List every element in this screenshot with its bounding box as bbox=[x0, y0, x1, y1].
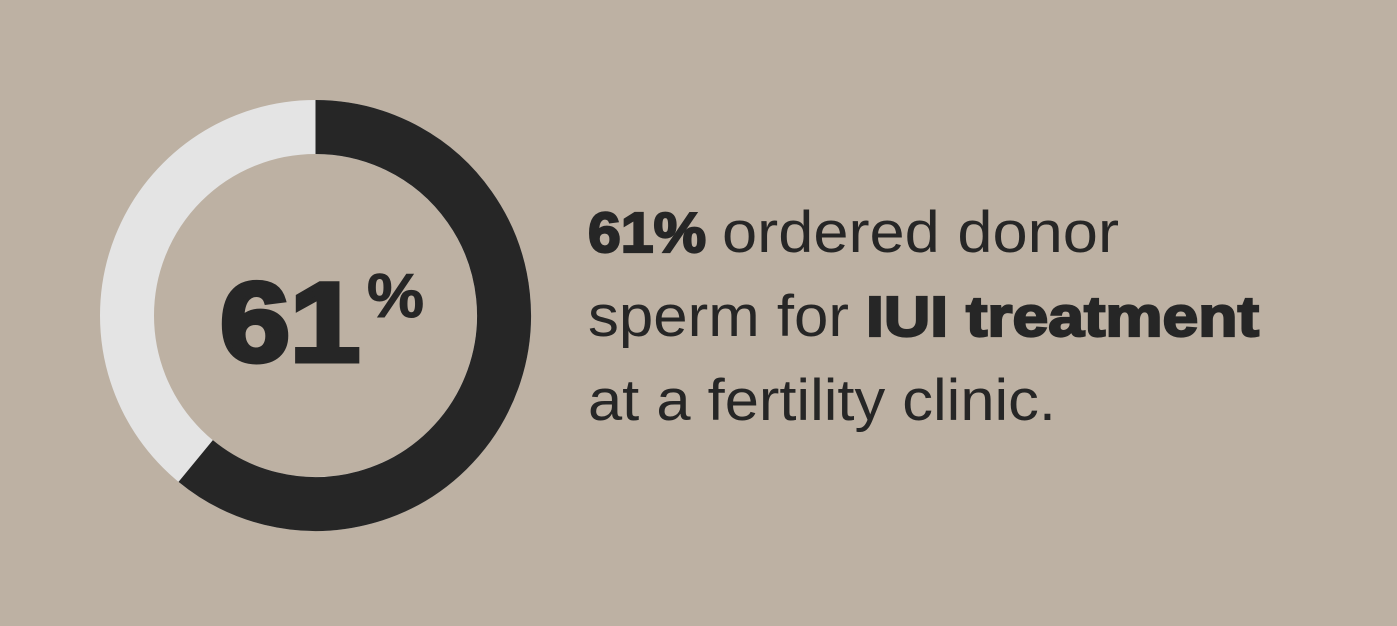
text line 1: ordered donor bbox=[722, 200, 1119, 265]
big number: % bbox=[367, 262, 424, 331]
donut track bbox=[127, 127, 504, 504]
big number bbox=[220, 260, 424, 385]
text block: description bbox=[588, 200, 1259, 433]
donut value arc bbox=[196, 127, 504, 504]
text line 3: at a fertility clinic. bbox=[588, 368, 1056, 433]
text line 2: IUI treatment bbox=[866, 285, 1259, 349]
text line 1 bbox=[588, 200, 1119, 265]
donut chart: 61% bbox=[127, 127, 504, 504]
big number: 61 bbox=[220, 260, 360, 385]
text line 1: 61% bbox=[588, 201, 706, 265]
text line 2: sperm for bbox=[588, 284, 849, 349]
text line 2 bbox=[588, 284, 1259, 349]
